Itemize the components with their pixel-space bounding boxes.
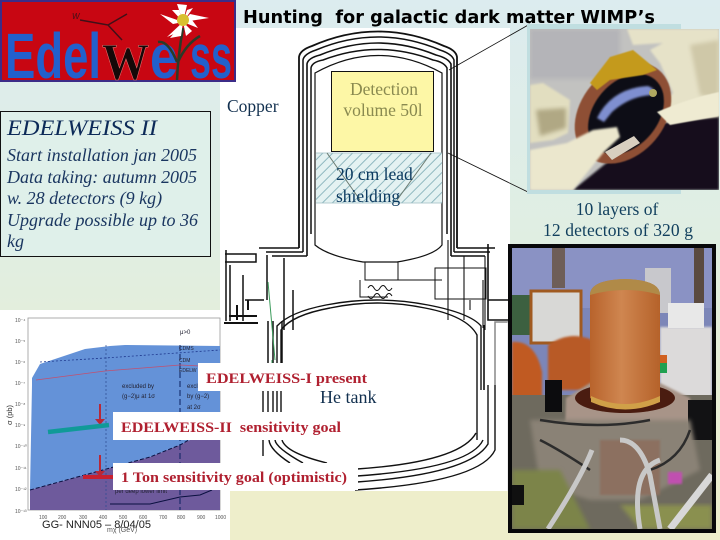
panel body text: Start installation jan 2005 — [7, 145, 197, 165]
callout: EDELWEISS-I present — [198, 363, 373, 391]
band: bottom background — [230, 491, 508, 540]
lead shielding — [316, 153, 442, 206]
axis tick labels: 10⁻⁴ — [15, 318, 25, 324]
lead shielding: 20 cm lead — [336, 164, 413, 184]
axis tick labels: 10⁻¹² — [15, 487, 27, 493]
callout: EDELWEISS-II sensitivity goal — [113, 412, 348, 440]
chart annotations: μ>0 — [180, 330, 191, 336]
lead shielding: shielding — [336, 186, 400, 206]
axis tick labels: 10⁻⁷ — [15, 381, 25, 387]
axis tick labels: 10⁻¹³ — [15, 509, 27, 515]
axis tick labels: 500 — [119, 515, 128, 521]
marker: EDELWEISS-II goal — [48, 404, 109, 432]
chart annotations: CDM — [179, 358, 190, 364]
axis tick labels: 10⁻⁶ — [15, 360, 25, 366]
axis tick labels: 100 — [39, 515, 48, 521]
panel body text: Upgrade possible up to 36 — [7, 210, 198, 230]
axis tick labels: 900 — [197, 515, 206, 521]
panel body text — [6, 145, 198, 251]
axis tick labels: 10⁻¹¹ — [15, 466, 27, 472]
leader lines to detector photo — [448, 24, 530, 193]
callout: EDELWEISS-II sensitivity goal: EDELWEISS-II sensitivity goal — [121, 420, 341, 436]
axis tick labels — [15, 318, 226, 521]
chart annotations: at 2σ — [187, 405, 201, 411]
chart annotations: per deep lower limit — [115, 489, 167, 495]
axis tick labels: 10⁻⁹ — [15, 423, 25, 429]
chart: WIMP cross-section exclusion plot — [5, 318, 226, 534]
caption: detector layers: 12 detectors of 320 g — [543, 220, 693, 240]
logo wordmark: Edel — [5, 20, 101, 92]
axis tick labels: 10⁻¹⁰ — [15, 444, 27, 450]
axis tick labels: 200 — [58, 515, 67, 521]
panel body text: Data taking: autumn 2005 — [6, 167, 197, 187]
chart annotations: by (g−2) — [187, 394, 209, 400]
y axis title: σ (pb) — [5, 404, 14, 425]
chart annotations: (g−2)μ at 1σ — [122, 394, 155, 400]
photo: detector held in gloves — [527, 24, 719, 194]
panel heading: EDELWEISS II — [6, 115, 159, 140]
excluded region blue — [30, 345, 220, 490]
logo: Edelweiss — [1, 1, 235, 92]
footer: conference date: GG- NNN05 – 8/04/05 — [42, 519, 151, 531]
panel body text: w. 28 detectors (9 kg) — [7, 188, 162, 209]
axis tick labels: 700 — [159, 515, 168, 521]
chart annotations: excl. — [187, 384, 200, 390]
heading: title: Hunting for galactic dark matter WIMP’s — [243, 8, 655, 28]
axis tick labels: 800 — [177, 515, 186, 521]
photo: copper cryostat — [508, 244, 716, 533]
axis tick labels: 10⁻⁵ — [15, 339, 25, 345]
callout: 1 Ton sensitivity goal: 1 Ton sensitivity goal (optimistic) — [121, 470, 347, 486]
caption: detector layers: 10 layers of — [576, 199, 658, 219]
icon: WIMP arrows in logo: W — [72, 12, 81, 21]
marker: 1 ton goal — [83, 455, 115, 477]
chart annotations — [115, 330, 209, 495]
label: He tank: He tank — [320, 387, 376, 407]
axis tick labels: 10⁻⁸ — [15, 402, 25, 408]
icon: WIMP arrows in logo — [72, 12, 127, 40]
allowed region purple — [30, 425, 220, 510]
callout: 1 Ton sensitivity goal — [113, 463, 358, 490]
x axis title: mχ (GeV) — [107, 527, 137, 534]
callout: EDELWEISS-I present: EDELWEISS-I present — [206, 371, 367, 387]
axis tick labels: 1000 — [215, 515, 226, 521]
icon: edelweiss flower — [158, 4, 209, 80]
label: Copper: Copper — [227, 96, 279, 116]
panel: detection volume: Detection — [350, 79, 418, 99]
chart annotations: EDELW — [179, 368, 197, 374]
logo letter e: e — [150, 23, 178, 92]
logo letters ss: ss — [190, 23, 232, 92]
axis tick labels: 600 — [139, 515, 148, 521]
axis tick labels: 300 — [79, 515, 88, 521]
chart annotations: excluded by — [122, 384, 154, 390]
logo letter W: W — [102, 34, 149, 91]
panel body text: kg — [7, 231, 24, 251]
axis tick labels: 400 — [99, 515, 108, 521]
dashed limit curve — [30, 422, 220, 490]
panel: EDELWEISS II — [0, 112, 210, 256]
panel: detection volume — [332, 72, 434, 152]
panel: detection volume: volume 50l — [343, 100, 423, 120]
caption: detector layers — [543, 199, 693, 240]
chart annotations: CDMS — [179, 346, 194, 352]
cryostat drawing — [224, 32, 510, 490]
